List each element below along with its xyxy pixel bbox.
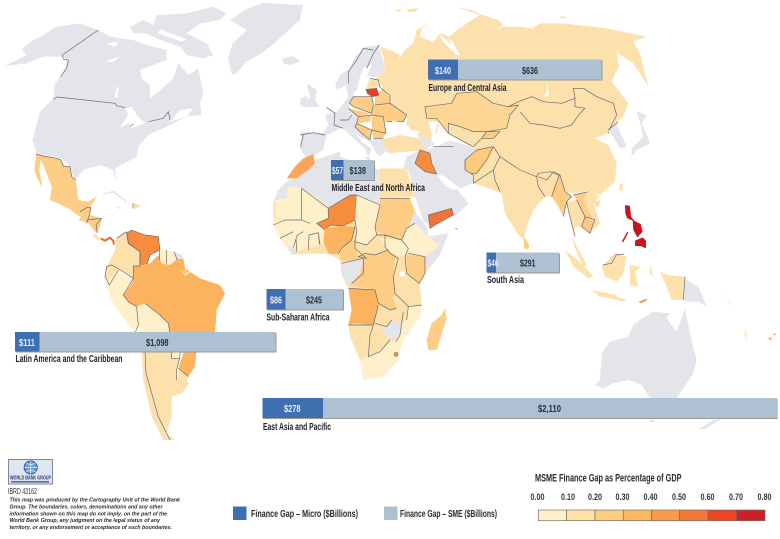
- bar: Middle East and North Africa: [331, 160, 425, 194]
- bar: Sub-Saharan Africa: [266, 289, 344, 324]
- text: disclaimer: World Bank Group, any judgment on the legal status of any: [10, 518, 161, 524]
- scale labels: 0.00: [530, 492, 544, 503]
- country: Peru: [105, 272, 138, 333]
- legend: finance gap micro: [233, 506, 358, 520]
- West Africa coast: [273, 218, 325, 255]
- bar: East Asia and Pacific: East Asia and Pacific: [263, 422, 331, 433]
- Malaysia and Indonesia: [565, 250, 685, 300]
- region: South America: [105, 230, 225, 440]
- bar: Middle East and North Africa: $57: [332, 165, 343, 177]
- region: Central America and Caribbean: [78, 192, 142, 245]
- country: Lesotho: [394, 352, 398, 356]
- Pakistan border: [473, 170, 493, 183]
- region: East and Southeast Asia: [524, 112, 685, 300]
- Taiwan and Hainan: [594, 183, 623, 207]
- country: DR Congo: [350, 250, 398, 310]
- region: Greenland and Iceland: [228, 3, 303, 75]
- bar: Europe and Central Asia: $140: [435, 65, 451, 77]
- bar: South Asia: South Asia: [487, 275, 524, 286]
- Gabon and Congo grey: [342, 258, 363, 285]
- country: Mali: [285, 188, 328, 232]
- scale labels: 0.60: [700, 492, 714, 503]
- country: Philippines: [622, 205, 646, 248]
- country: Nigeria: [323, 226, 355, 254]
- bar: Sub-Saharan Africa: $245: [306, 294, 322, 306]
- country: Afghanistan: [465, 147, 493, 173]
- bar: Latin America and the Caribbean: [15, 332, 276, 365]
- legend title: MSME Finance Gap as Percentage of GDP: [535, 472, 682, 484]
- country: Myanmar: [552, 175, 572, 217]
- country: Sudan: [375, 198, 415, 240]
- country: Australia: [595, 308, 697, 398]
- legend: finance gap SME: [384, 506, 497, 520]
- country: Laos: [573, 192, 595, 220]
- country: Yemen: [428, 208, 453, 228]
- country: Egypt: [380, 168, 415, 198]
- region: Central Asia countries: [448, 123, 487, 147]
- text: disclaimer: This map was produced by the Cartography Unit of the World Bank: [10, 498, 181, 504]
- country: Kenya: [407, 255, 425, 283]
- legend: MSME finance gap colour scale: [530, 472, 772, 521]
- region: Scandinavia: [335, 45, 385, 94]
- scale labels: 0.50: [672, 492, 686, 503]
- country: Chad: [355, 195, 380, 245]
- country: Sri Lanka: [524, 237, 529, 249]
- bar: South Asia: [486, 252, 560, 286]
- bar: East Asia and Pacific: $278: [284, 403, 301, 415]
- country: Mozambique: [396, 305, 422, 350]
- country: Central African Republic: [355, 235, 388, 257]
- text: disclaimer: Group. The boundaries, colors, denominations and any other: [10, 504, 163, 510]
- country: Papua New Guinea: [684, 279, 707, 307]
- country: Zimbabwe: [382, 320, 402, 340]
- text: disclaimer: [10, 498, 181, 531]
- region: Italy: [343, 128, 372, 161]
- bar: Europe and Central Asia: Europe and Central Asia: [428, 83, 507, 94]
- country: Uruguay: [177, 370, 188, 383]
- text: map reference number: IBRD 43162: [8, 486, 37, 496]
- bar: Sub-Saharan Africa: Sub-Saharan Africa: [266, 312, 330, 324]
- region: Australia and Oceania: [592, 279, 777, 429]
- scale labels: 0.20: [588, 492, 602, 503]
- Russia, China and India blob: [375, 7, 648, 240]
- Arctic islands: [393, 8, 568, 19]
- country: Tanzania: [395, 273, 422, 307]
- region: Middle East: [403, 142, 473, 225]
- region: North America: [5, 7, 227, 217]
- Indonesia lesser islands: [592, 290, 627, 302]
- region: UK and Ireland: [300, 83, 320, 107]
- bar: Middle East and North Africa: $138: [350, 165, 366, 177]
- Horn of Africa grey: [410, 212, 448, 272]
- logo: World Bank Group: [8, 460, 52, 484]
- Thailand and mainland: [567, 200, 587, 267]
- Africa silhouette: [273, 170, 448, 380]
- scale labels: 0.70: [729, 492, 743, 503]
- scale labels: 0.80: [758, 492, 772, 503]
- country: Chile and Argentina: [142, 350, 189, 440]
- Japan and Korea grey: [608, 112, 650, 157]
- country: Iraq: [415, 150, 437, 174]
- country: Mauritania: [275, 187, 302, 220]
- country: Bolivia: [137, 303, 170, 333]
- bar: Middle East and North Africa: Middle East and North Africa: [332, 183, 425, 194]
- country: Cambodia: [582, 217, 594, 233]
- bar: South Asia: $46: [488, 258, 499, 270]
- country: Botswana: [370, 327, 390, 352]
- scale labels: 0.30: [616, 492, 630, 503]
- country: Mexico: [34, 154, 97, 217]
- country: Namibia: [348, 325, 373, 360]
- bar: South Asia: $291: [520, 258, 536, 270]
- country: South Sudan: [380, 238, 408, 257]
- country: Niger: [317, 195, 357, 230]
- text: disclaimer: information shown on this map do not imply, on the part of the: [10, 512, 167, 518]
- scale labels: 0.40: [644, 492, 658, 503]
- region: Africa: [273, 152, 458, 380]
- North Africa grey: [273, 152, 380, 208]
- bar: Europe and Central Asia: [428, 60, 602, 94]
- legend: finance gap micro: Finance Gap – Micro ($Billions): [251, 508, 358, 520]
- bar: Latin America and the Caribbean: Latin America and the Caribbean: [16, 354, 122, 365]
- country: Venezuela: [127, 230, 160, 266]
- country: Colombia: [107, 232, 140, 278]
- country: French Guiana: [174, 252, 183, 261]
- region: Western Europe: [299, 86, 387, 157]
- bar: Latin America and the Caribbean: $1,098: [146, 337, 169, 349]
- country: Zambia: [375, 307, 407, 327]
- scale swatches: [538, 510, 765, 521]
- country: Lithuania: [366, 88, 379, 97]
- bar: East Asia and Pacific: $2,110: [538, 403, 561, 415]
- logo: World Bank Group: WORLD BANK GROUP: [10, 476, 51, 482]
- country: Guyana and Suriname: [158, 250, 177, 265]
- region: Asia and Russia landmass: [299, 7, 648, 240]
- country: Brazil: [123, 255, 225, 333]
- country: South Africa: [360, 342, 400, 380]
- borders of Iran: [465, 160, 473, 183]
- legend: finance gap SME: Finance Gap – SME ($Billions): [400, 508, 497, 520]
- country: Kazakhstan: [425, 92, 518, 133]
- scale labels: [530, 492, 772, 503]
- seas: [388, 121, 440, 142]
- country: Ecuador: [105, 265, 118, 285]
- country: Morocco: [287, 154, 315, 178]
- bar: Sub-Saharan Africa: $86: [270, 294, 282, 306]
- text: disclaimer: territory, or any endorsement or acceptance of such boundaries.: [10, 525, 172, 531]
- region: Europe east: [366, 78, 380, 88]
- bar: Europe and Central Asia: $636: [522, 65, 538, 77]
- country: Cameroon: [340, 240, 367, 262]
- bar: East Asia and Pacific: [262, 398, 778, 433]
- country: Turkey: [382, 135, 426, 153]
- bar: Latin America and the Caribbean: $111: [19, 337, 35, 349]
- country: Angola: [348, 288, 378, 325]
- country: Madagascar: [427, 308, 447, 350]
- Iran north border: [433, 146, 453, 148]
- scale labels: 0.10: [561, 492, 575, 503]
- country: Ethiopia: [402, 223, 440, 257]
- country: Ukraine: [372, 103, 407, 122]
